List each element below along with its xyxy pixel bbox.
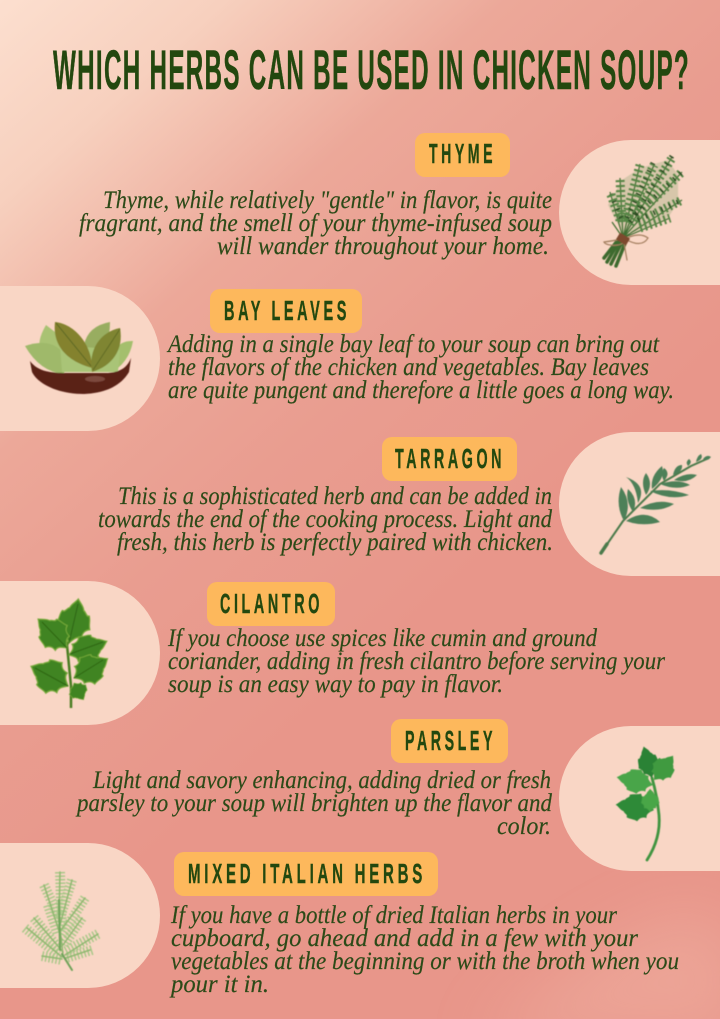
text: tarragon: towards the end of the cooking process. Light and xyxy=(98,506,552,533)
icon: tarragon sprig xyxy=(601,454,711,553)
text: tarragon: This is a sophisticated herb and can be added in xyxy=(118,483,552,510)
icon: cilantro sprig xyxy=(23,596,115,708)
panel: tarragon xyxy=(559,432,720,576)
heading: thyme xyxy=(415,133,510,177)
heading: cilantro: CILANTRO xyxy=(220,588,323,619)
text: parsley: Light and savory enhancing, adding dried or fresh xyxy=(92,767,551,794)
text: thyme: Thyme, while relatively "gentle" in flavor, is quite xyxy=(103,187,552,214)
text: parsley xyxy=(75,767,552,840)
panel: bay leaves xyxy=(0,286,160,431)
text: cilantro xyxy=(167,625,665,698)
text: bay leaves xyxy=(166,331,674,404)
icon: thyme bundle xyxy=(604,156,682,266)
panel: thyme xyxy=(559,140,720,285)
panel: cilantro xyxy=(0,581,160,725)
parsley image panel xyxy=(559,726,720,871)
text: bay leaves: Adding in a single bay leaf to your soup can bring out xyxy=(166,331,660,358)
text: bay leaves: the flavors of the chicken and vegetables. Bay leaves xyxy=(168,354,649,381)
text: mixed italian herbs: pour it in. xyxy=(169,971,269,998)
text: thyme: will wander throughout your home. xyxy=(217,233,549,260)
heading: mixed italian herbs: MIXED ITALIAN HERBS xyxy=(188,858,426,889)
text: mixed italian herbs: vegetables at the beginning or with the broth when you xyxy=(171,948,679,975)
text: bay leaves: are quite pungent and therefore a little goes a long way. xyxy=(168,377,674,404)
text: cilantro: If you choose use spices like cumin and ground xyxy=(167,625,597,652)
cilantro image panel xyxy=(0,581,160,725)
text: tarragon xyxy=(98,483,553,556)
text: parsley: color. xyxy=(497,813,551,840)
text: mixed italian herbs: If you have a bottle of dried Italian herbs in your xyxy=(170,902,617,929)
text: cilantro: coriander, adding in fresh cilantro before serving your xyxy=(168,648,665,675)
heading: parsley xyxy=(391,719,508,763)
icon: bay leaves bowl xyxy=(25,322,133,394)
text: parsley: parsley to your soup will brighten up the flavor and xyxy=(75,790,552,817)
mixed italian herbs image panel xyxy=(0,843,160,988)
bay leaves image panel xyxy=(0,286,160,431)
icon: dill sprig xyxy=(25,872,98,970)
text: thyme: fragrant, and the smell of your thyme-infused soup xyxy=(79,210,552,237)
heading: mixed italian herbs xyxy=(174,852,438,896)
heading: tarragon xyxy=(382,437,517,481)
text: mixed italian herbs xyxy=(169,902,679,998)
text: cilantro: soup is an easy way to pay in flavor. xyxy=(168,671,503,698)
text: mixed italian herbs: cupboard, go ahead and add in a few with your xyxy=(171,925,638,952)
thyme image panel xyxy=(559,140,720,285)
heading: bay leaves: BAY LEAVES xyxy=(224,295,350,326)
panel: mixed italian herbs xyxy=(0,843,160,988)
heading: bay leaves xyxy=(210,289,362,333)
text: tarragon: fresh, this herb is perfectly paired with chicken. xyxy=(117,529,553,556)
icon: parsley sprig xyxy=(614,744,683,860)
text: thyme xyxy=(79,187,552,260)
heading: cilantro xyxy=(207,582,335,626)
panel: parsley xyxy=(559,726,720,871)
heading: tarragon: TARRAGON xyxy=(395,443,505,474)
heading: parsley: PARSLEY xyxy=(405,725,496,756)
tarragon image panel xyxy=(559,432,720,576)
heading: thyme: THYME xyxy=(429,138,496,169)
